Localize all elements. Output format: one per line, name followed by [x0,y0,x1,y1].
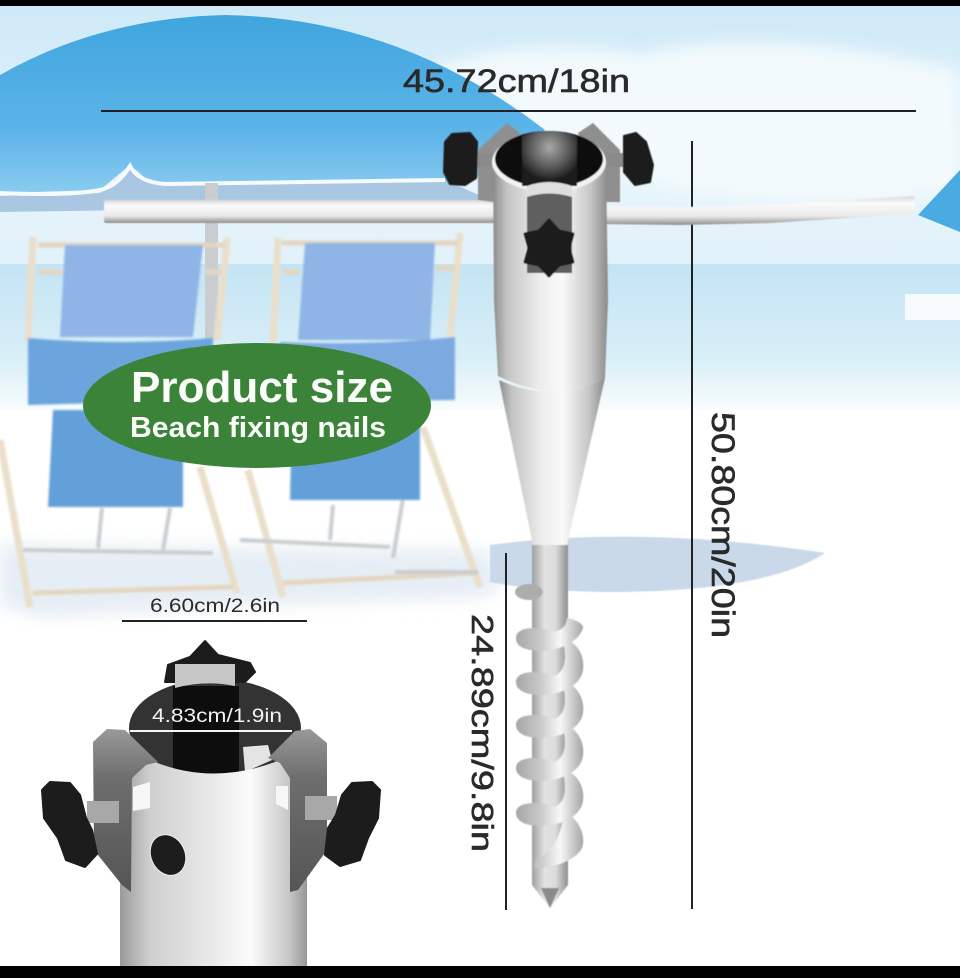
tube hole [144,829,192,881]
left chair back [60,245,203,337]
left knob [42,782,119,867]
left bracket [93,729,158,892]
right chair band [280,337,455,402]
screw threads [515,584,583,868]
right chair back [298,243,435,340]
height dimension: 50.80cm/20in: 50.80cm/20in [705,412,741,638]
tube opening [492,131,606,192]
beach chairs [0,233,480,607]
badge: product size [83,343,431,468]
top knob [165,641,255,688]
width dimension: 45.72cm/18in: 45.72cm/18in [403,63,630,99]
fixing nail product [104,123,915,908]
front star knob [525,220,573,276]
right knob [603,133,653,185]
badge: product size: Beach fixing nails [130,412,386,444]
tube interior [129,679,301,777]
front slot [527,184,572,273]
lower cone [499,378,605,545]
inner diameter label: 4.83cm/1.9in: 4.83cm/1.9in [152,706,282,727]
screw shaft [532,545,568,908]
screw tip [541,888,559,908]
badge: product size: Product size [131,363,393,412]
right bracket [578,123,620,202]
upper tube [493,160,608,391]
top black bar [0,0,960,6]
screw length dimension: 24.89cm/9.8in: 24.89cm/9.8in [465,614,500,852]
chair frames [0,233,480,607]
bottom black bar [0,966,960,978]
detail view width label: 6.60cm/2.6in: 6.60cm/2.6in [150,596,280,617]
left chair band [28,338,213,405]
right bracket [268,729,327,892]
right knob [305,782,380,866]
left chair seat [48,410,183,507]
right chair seat [290,410,420,500]
detail view of tube head [42,641,380,966]
left knob [444,133,495,185]
beach umbrella [0,15,960,340]
left bracket [478,123,520,202]
cross bar handle [104,196,915,225]
tube body [120,758,307,966]
